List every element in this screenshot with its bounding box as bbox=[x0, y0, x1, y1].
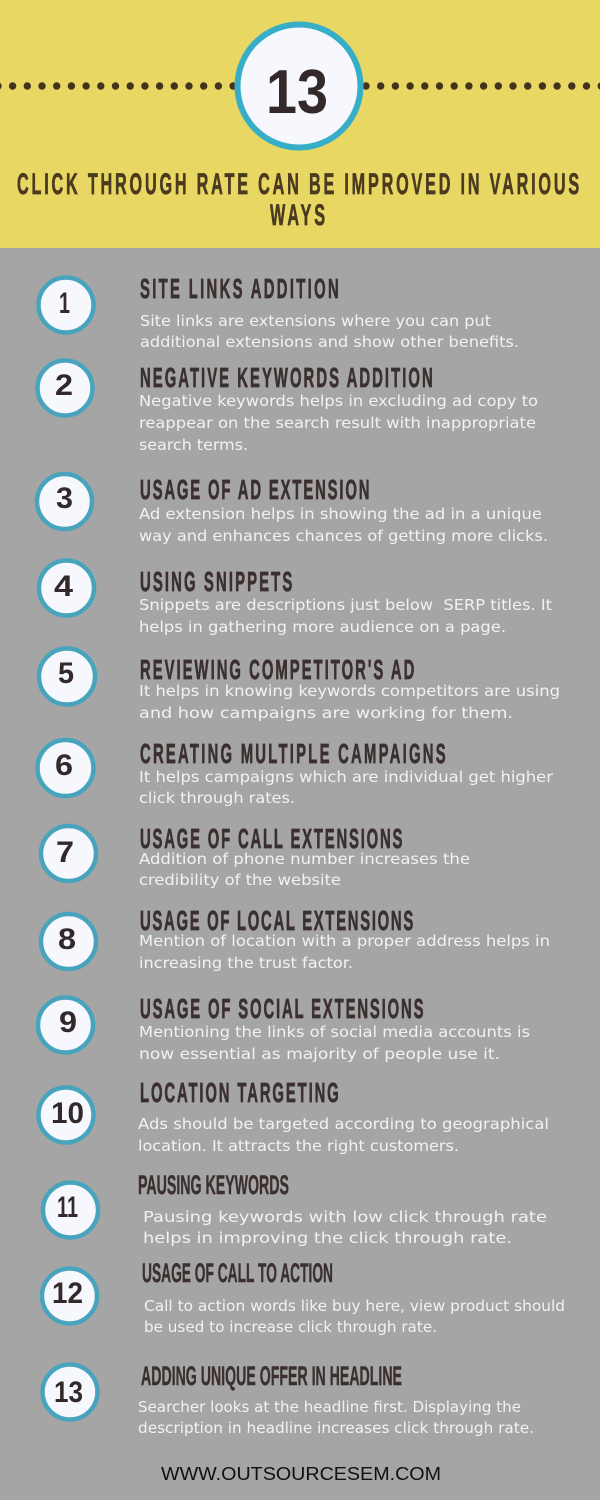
item 8: usage of local extensions: increasing the trust factor. bbox=[139, 954, 353, 972]
item 7: usage of call extensions: credibility of the website bbox=[139, 871, 341, 889]
item 12: usage of call to action: 12 bbox=[52, 1277, 83, 1310]
item 13: adding unique offer in headline: description in headline increases click through rate. bbox=[138, 1419, 534, 1437]
item 11: pausing keywords: 11 bbox=[57, 1191, 78, 1224]
footer website url: WWW.OUTSOURCESEM.COM bbox=[161, 1464, 441, 1484]
item 3: usage of ad extension: 3 bbox=[56, 482, 73, 515]
item 1: site links addition: Site links are extensions where you can put bbox=[140, 312, 491, 330]
main number badge: 13 bbox=[266, 58, 328, 127]
item 10: location targeting: 10 bbox=[51, 1097, 84, 1130]
item 1: site links addition: SITE LINKS ADDITION bbox=[140, 273, 339, 304]
item 9: usage of social extensions: USAGE OF SOCIAL EXTENSIONS bbox=[140, 993, 424, 1024]
item 1: site links addition: 1 bbox=[59, 287, 70, 320]
header panel bbox=[0, 0, 600, 248]
item 2: negative keywords addition: reappear on the search result with inappropriate bbox=[139, 414, 536, 432]
item 11: pausing keywords: helps in improving the click through rate. bbox=[143, 1229, 512, 1247]
item 10: location targeting: location. It attracts the right customers. bbox=[138, 1137, 459, 1155]
dotted line bbox=[0, 82, 600, 90]
item 12: usage of call to action: be used to increase click through rate. bbox=[144, 1318, 437, 1336]
item 10: location targeting bbox=[38, 1077, 549, 1155]
item 6: creating multiple campaigns: CREATING MULTIPLE CAMPAIGNS bbox=[140, 738, 446, 769]
title: WAYS bbox=[270, 199, 325, 232]
item 6: creating multiple campaigns: It helps campaigns which are individual get higher bbox=[139, 768, 554, 786]
item 3: usage of ad extension: way and enhances chances of getting more clicks. bbox=[139, 527, 548, 545]
item 9: usage of social extensions bbox=[38, 993, 530, 1063]
item 4: using snippets: USING SNIPPETS bbox=[140, 566, 292, 597]
item 3: usage of ad extension bbox=[37, 474, 548, 545]
item 11: pausing keywords bbox=[43, 1170, 547, 1247]
item 5: reviewing competitor's ad: 5 bbox=[58, 657, 74, 690]
item 8: usage of local extensions: USAGE OF LOCAL EXTENSIONS bbox=[140, 905, 413, 936]
main number badge bbox=[238, 24, 360, 148]
item 12: usage of call to action: USAGE OF CALL TO ACTION bbox=[142, 1258, 333, 1288]
item 6: creating multiple campaigns: click through rates. bbox=[139, 789, 295, 807]
item 5: reviewing competitor's ad bbox=[39, 648, 560, 722]
item 9: usage of social extensions: now essential as majority of people use it. bbox=[139, 1045, 500, 1063]
item 4: using snippets: 4 bbox=[54, 570, 73, 603]
item 12: usage of call to action bbox=[42, 1258, 565, 1336]
item 8: usage of local extensions bbox=[41, 905, 550, 972]
item 13: adding unique offer in headline bbox=[42, 1361, 534, 1437]
item 4: using snippets: Snippets are descriptions just below SERP titles. It bbox=[139, 596, 552, 614]
item 1: site links addition bbox=[38, 273, 519, 351]
item 6: creating multiple campaigns: 6 bbox=[55, 749, 73, 782]
item 8: usage of local extensions: Mention of location with a proper address helps in bbox=[139, 932, 550, 950]
item 9: usage of social extensions: 9 bbox=[59, 1006, 77, 1039]
title bbox=[17, 168, 579, 232]
item 3: usage of ad extension: Ad extension helps in showing the ad in a unique bbox=[139, 505, 542, 523]
item 2: negative keywords addition bbox=[38, 360, 538, 454]
item 7: usage of call extensions: Addition of phone number increases the bbox=[139, 850, 470, 868]
item 11: pausing keywords: PAUSING KEYWORDS bbox=[138, 1170, 289, 1200]
item 6: creating multiple campaigns bbox=[38, 738, 554, 807]
item 2: negative keywords addition: NEGATIVE KEYWORDS ADDITION bbox=[140, 362, 433, 393]
item 7: usage of call extensions: USAGE OF CALL EXTENSIONS bbox=[140, 823, 402, 854]
item 10: location targeting: LOCATION TARGETING bbox=[140, 1077, 339, 1108]
item 1: site links addition: additional extensions and show other benefits. bbox=[140, 333, 519, 351]
title: CLICK THROUGH RATE CAN BE IMPROVED IN VARIOUS bbox=[17, 168, 579, 201]
item 5: reviewing competitor's ad: It helps in knowing keywords competitors are using bbox=[139, 682, 560, 700]
item 2: negative keywords addition: Negative keywords helps in excluding ad copy to bbox=[139, 392, 538, 410]
item 12: usage of call to action: Call to action words like buy here, view product should bbox=[144, 1297, 565, 1315]
item 4: using snippets: helps in gathering more audience on a page. bbox=[139, 618, 506, 636]
item 5: reviewing competitor's ad: and how campaigns are working for them. bbox=[139, 704, 513, 722]
item 13: adding unique offer in headline: 13 bbox=[54, 1376, 83, 1409]
item 8: usage of local extensions: 8 bbox=[58, 923, 76, 956]
item 7: usage of call extensions: 7 bbox=[56, 836, 74, 869]
item 10: location targeting: Ads should be targeted according to geographical bbox=[138, 1115, 549, 1133]
item 5: reviewing competitor's ad: REVIEWING COMPETITOR'S AD bbox=[140, 654, 414, 685]
item 4: using snippets bbox=[39, 560, 552, 636]
item 2: negative keywords addition: search terms. bbox=[139, 436, 248, 454]
item 13: adding unique offer in headline: Searcher looks at the headline first. Displaying the bbox=[138, 1398, 521, 1416]
item 7: usage of call extensions bbox=[41, 823, 470, 889]
item 11: pausing keywords: Pausing keywords with low click through rate bbox=[143, 1208, 547, 1226]
item 2: negative keywords addition: 2 bbox=[55, 369, 73, 402]
item 3: usage of ad extension: USAGE OF AD EXTENSION bbox=[140, 474, 370, 505]
item 9: usage of social extensions: Mentioning the links of social media accounts is bbox=[139, 1023, 530, 1041]
